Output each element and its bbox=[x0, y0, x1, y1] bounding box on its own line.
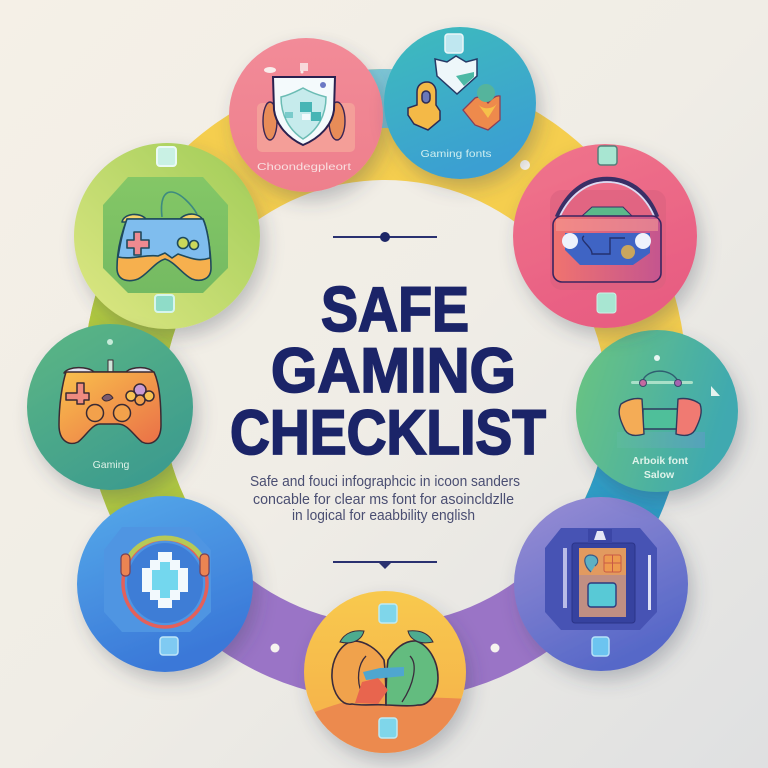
badge: rose console bbox=[513, 144, 697, 328]
badge: purple device bbox=[514, 497, 688, 671]
side bar left bbox=[563, 548, 567, 608]
panel groove bbox=[583, 236, 625, 254]
controller bbox=[59, 360, 161, 443]
backing square bbox=[550, 190, 666, 290]
small vehicle icon bbox=[631, 371, 693, 386]
small dot bbox=[320, 82, 326, 88]
ring icon bbox=[123, 538, 207, 627]
inner grooves bbox=[359, 656, 414, 702]
label bbox=[632, 455, 688, 481]
description text: concable for clear ms font for asoincldzlle bbox=[253, 492, 514, 508]
backing plate bbox=[257, 103, 355, 152]
device bbox=[572, 543, 635, 623]
connector light bbox=[594, 531, 606, 540]
screen top tint bbox=[579, 548, 626, 575]
tag bbox=[592, 637, 609, 656]
pixel blocks bbox=[285, 102, 321, 121]
cushion icon bbox=[619, 399, 701, 435]
ears bbox=[263, 102, 345, 140]
octagon plate bbox=[103, 177, 228, 293]
shield bbox=[435, 56, 477, 94]
centre splash red bbox=[355, 678, 388, 704]
ring: coloured segmented band bbox=[88, 69, 683, 690]
label: Choondegpleort bbox=[257, 161, 351, 173]
badge: orange fruit bbox=[300, 591, 470, 760]
title bbox=[230, 275, 546, 468]
green bump bbox=[477, 84, 495, 102]
handle bbox=[557, 179, 657, 217]
badge: mint font card bbox=[576, 330, 738, 492]
tag bbox=[157, 147, 176, 166]
label: Gaming fonts bbox=[420, 148, 492, 160]
controller bbox=[117, 192, 211, 281]
heart centre bbox=[478, 102, 498, 118]
blue panel bbox=[565, 233, 650, 265]
lower orange wedge bbox=[314, 698, 462, 753]
side bar right bbox=[648, 555, 651, 610]
handle highlight bbox=[560, 182, 654, 216]
label: Salow bbox=[644, 469, 675, 481]
title: SAFE bbox=[321, 275, 469, 345]
screen swirl bbox=[585, 555, 598, 572]
top connector bbox=[588, 529, 612, 543]
badge: lime controller bbox=[74, 143, 260, 329]
description text: Safe and fouci infographcic in icoon sanders bbox=[250, 474, 520, 490]
tag bbox=[379, 718, 397, 738]
badge: pink shield bbox=[229, 38, 383, 192]
inner shield bbox=[281, 88, 326, 139]
label: Arboik font bbox=[632, 455, 688, 467]
ring white dots bbox=[270, 160, 530, 652]
dot bbox=[654, 355, 660, 361]
badge: green controller bbox=[27, 324, 193, 490]
centre splash blue bbox=[363, 667, 404, 680]
badge: blue headset bbox=[77, 496, 253, 672]
small triangle bbox=[711, 386, 720, 396]
screen grid bbox=[604, 555, 621, 572]
body highlight band bbox=[556, 219, 658, 231]
console body bbox=[553, 216, 661, 282]
shield bbox=[273, 77, 335, 145]
right blob bbox=[386, 641, 438, 706]
tag bbox=[160, 637, 178, 655]
tag bbox=[445, 34, 463, 53]
screen teal button bbox=[588, 583, 616, 607]
tag bbox=[155, 295, 174, 312]
centre title block bbox=[230, 232, 546, 569]
plate bbox=[545, 528, 657, 630]
tag bbox=[597, 293, 616, 313]
leaves bbox=[340, 631, 364, 643]
tag bbox=[598, 146, 617, 165]
headset ear cups bbox=[121, 554, 209, 576]
shield green wedge bbox=[456, 72, 474, 86]
tag bbox=[379, 604, 397, 623]
top divider bbox=[333, 232, 437, 242]
hexagon plate bbox=[104, 527, 211, 632]
description text bbox=[250, 474, 520, 524]
heart bbox=[463, 96, 500, 130]
screen bbox=[579, 548, 626, 617]
bottom band bbox=[617, 432, 705, 448]
bottom divider bbox=[333, 561, 437, 569]
dot bbox=[107, 339, 113, 345]
description text: in logical for eaabbility english bbox=[292, 508, 475, 524]
title: CHECKLIST bbox=[230, 398, 546, 468]
sparkles bbox=[264, 63, 308, 74]
left blob bbox=[332, 641, 386, 705]
title: GAMING bbox=[271, 336, 516, 406]
padlock bbox=[408, 82, 440, 130]
top green lid bbox=[582, 207, 632, 216]
buttons bbox=[562, 233, 651, 259]
label: Gaming bbox=[93, 459, 130, 471]
badge: teal security icons bbox=[384, 27, 536, 179]
pixel cross bbox=[142, 552, 188, 608]
